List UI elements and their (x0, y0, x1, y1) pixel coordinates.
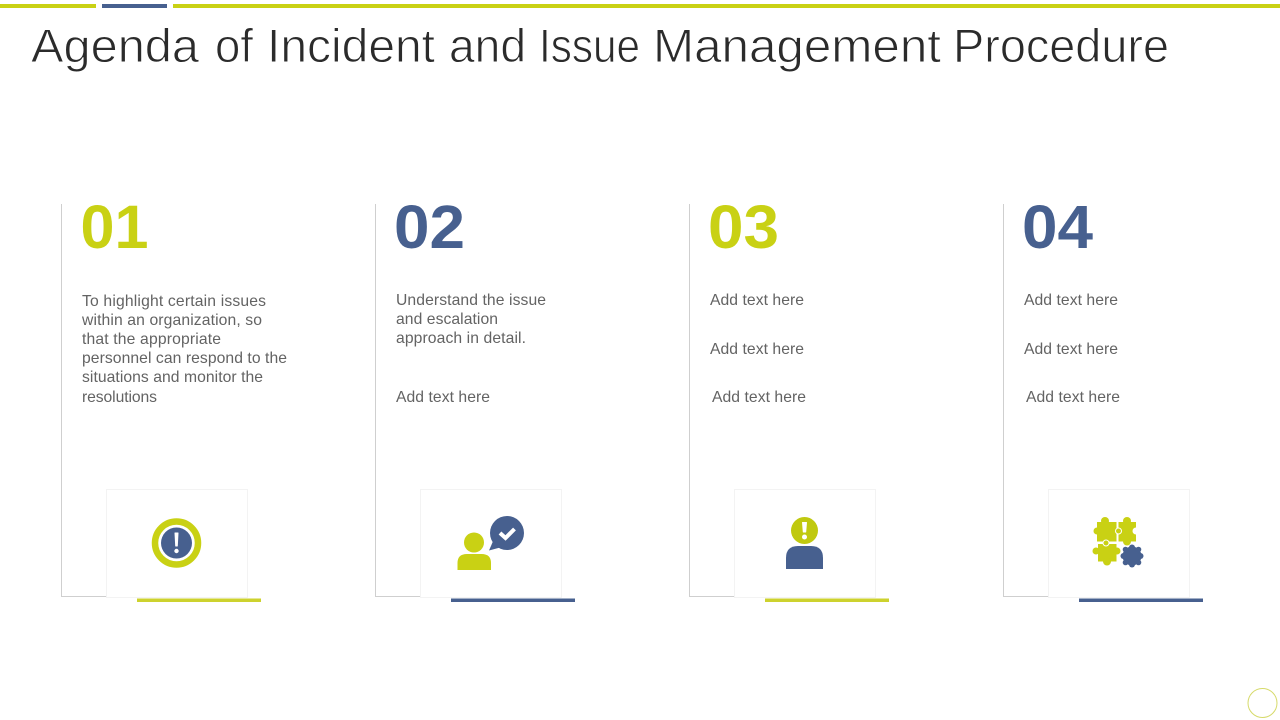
title: Management (653, 19, 941, 72)
text block 02: Add text here (396, 389, 490, 406)
icon card 03 (734, 490, 876, 598)
text block 03: Add text here (710, 341, 804, 358)
text block 01: that the appropriate (82, 331, 221, 348)
icon: person with check bubble (458, 516, 524, 570)
accent underline 01 (137, 598, 261, 602)
icon card 04 (1048, 490, 1190, 598)
title: Procedure (953, 19, 1169, 72)
panel frame 04 (1004, 204, 1048, 596)
text block 02: Understand the issue (396, 292, 546, 309)
corner circle (1248, 688, 1277, 718)
icon: person with alert (786, 517, 823, 569)
number 03: 03 (708, 193, 779, 261)
text block 01: resolutions (82, 389, 157, 406)
text block 03: Add text here (712, 389, 806, 406)
top accent bars (0, 4, 1280, 8)
text block 04 (1024, 292, 1120, 406)
icon: puzzle pieces (1092, 517, 1144, 568)
text block 02: and escalation (396, 311, 498, 328)
accent underline 03 (765, 598, 889, 602)
icon card 01 (106, 490, 248, 598)
number 01: 01 (80, 193, 148, 261)
number 04: 04 (1022, 193, 1093, 261)
title: and (449, 19, 526, 72)
icon: alert in ring (155, 522, 198, 564)
text block 02 (396, 292, 546, 406)
number 02: 02 (394, 193, 465, 261)
text block 03 (710, 292, 806, 406)
title: Agenda (31, 19, 200, 72)
panel: agenda 02 (376, 193, 575, 602)
accent underline 02 (451, 598, 575, 602)
text block 01: personnel can respond to the (82, 350, 287, 367)
text block 01: To highlight certain issues (82, 293, 266, 310)
text block 04: Add text here (1024, 292, 1118, 309)
accent underline 04 (1079, 598, 1203, 602)
title: Incident (267, 19, 435, 72)
text block 02: approach in detail. (396, 330, 526, 347)
text block 03: Add text here (710, 292, 804, 309)
panel: agenda 01 (62, 193, 287, 602)
title: of (215, 19, 254, 72)
panel frame 01 (62, 204, 106, 596)
panel: agenda 04 (1004, 193, 1203, 602)
panel: agenda 03 (690, 193, 889, 602)
text block 04: Add text here (1024, 341, 1118, 358)
text block 01 (81, 293, 287, 406)
text block 01: situations and monitor the (82, 369, 263, 386)
panel frame 02 (376, 204, 420, 596)
text block 04: Add text here (1026, 389, 1120, 406)
text block 01: within an organization, so (81, 312, 262, 329)
panel frame 03 (690, 204, 734, 596)
title (31, 19, 1169, 72)
title: Issue (539, 19, 640, 72)
icon card 02 (420, 490, 562, 598)
